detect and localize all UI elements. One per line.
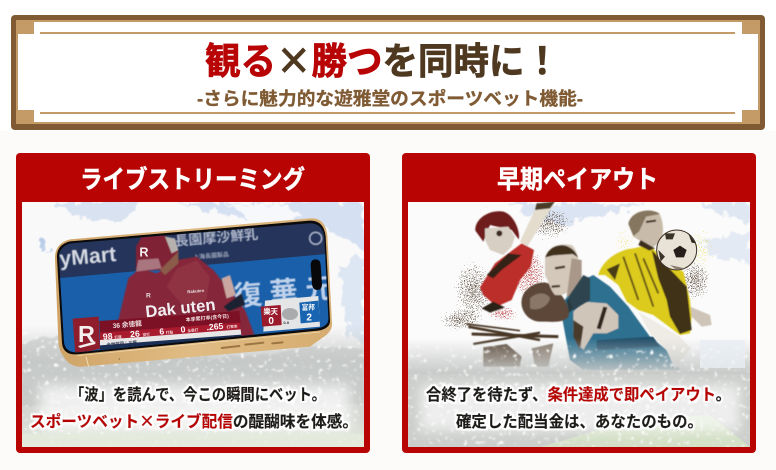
phone screen: baseball broadcast: 長園摩沙鮮乳 [174,226,259,249]
athlete: soccer player in yellow [598,210,723,370]
broadcast lower third: 36 余徳龍 [112,319,142,330]
phone screen: baseball broadcast: Rakuten [187,288,205,294]
panel: early payout [402,153,756,453]
broadcast lower third: 26 [130,328,140,339]
broadcast lower third: 打點 [166,329,174,335]
stadium foreground [408,338,750,447]
illustration: three athletes [435,200,723,370]
heading: live streaming: ライブストリーミング [80,165,305,194]
caption [426,385,731,431]
scoreboard: 0-0 [283,320,290,325]
title: 観る×勝つを同時に！ [205,31,560,85]
scoreboard [261,296,320,332]
subtitle: -さらに魅力的な遊雅堂のスポーツベット機能- [197,88,583,109]
scoreboard: 樂天 [263,307,279,316]
broadcast lower third: 打擊率 [226,324,238,330]
phone screen: baseball broadcast: 上海長園製品 [193,250,229,261]
caption: 「波」を読んで、今この瞬間にベット。 [70,385,326,404]
broadcast lower third: .265 [206,321,224,332]
panel: live streaming [16,153,370,453]
soccer ball [657,230,697,270]
panel background: stadium [408,200,750,447]
scoreboard: 富邦 [302,302,315,311]
broadcast lower third: 今世前回：三振 [106,339,138,348]
player [118,235,255,343]
phone screen: baseball broadcast: R [139,246,148,260]
scoreboard: 2 [306,313,312,324]
broadcast lower third: 0 [180,324,186,335]
caption: 合終了を待たず、条件達成で即ペイアウト。 [426,385,731,404]
broadcast lower third: 全壘打 [187,327,199,333]
broadcast lower third: R [78,321,95,347]
athlete: baseball batter [442,202,572,367]
broadcast lower third: 安打 [142,331,150,337]
athlete: basketball player in blue [560,275,680,370]
phone screen: baseball broadcast: R [146,292,151,299]
caption: スポーツベット×ライブ配信の醍醐味を体感。 [30,408,358,432]
banner: title frame [11,15,765,130]
caption [30,385,358,432]
phone [50,210,337,367]
phone screen: baseball broadcast: Dak uten [144,295,216,321]
broadcast lower third: 6 [159,326,165,337]
broadcast lower third: 98 [102,331,113,342]
scoreboard: 0 [268,316,274,327]
broadcast lower third [73,310,242,355]
broadcast lower third: 打席 [114,334,122,340]
phone screen: baseball broadcast: 復 華 元 [233,272,335,312]
phone gold body [55,218,332,367]
caption: 確定した配当金は、あなたのもの。 [456,412,703,431]
broadcast lower third: 本季累打率(含今日) [185,313,229,324]
heading: early payout: 早期ペイアウト [497,166,658,194]
phone screen: baseball broadcast [59,223,328,352]
sponsor text: yMart [58,242,117,271]
panel background: splashes and stadium [22,202,364,447]
phone camera pill [311,259,322,290]
